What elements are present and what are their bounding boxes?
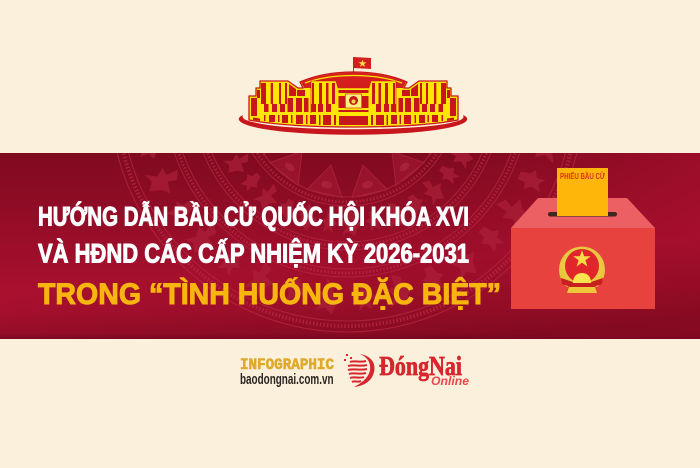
national emblem: [559, 247, 605, 293]
infographic label: INFOGRAPHIC: [240, 356, 334, 374]
flag: [353, 57, 371, 73]
title line 2: VÀ HĐND CÁC CẤP NHIỆM KỲ 2026-2031: [38, 238, 469, 268]
bronze drum pattern: [116, 153, 578, 332]
box lid: [511, 198, 655, 228]
wordmark: ĐóngNai: [379, 351, 462, 381]
title line 3 highlighted: TRONG “TÌNH HUỐNG ĐẶC BIỆT”: [38, 277, 501, 311]
ballot paper: [557, 168, 608, 216]
logo: National Assembly building: [239, 57, 467, 135]
ballot paper: PHIẾU BẦU CỬ: [560, 171, 605, 181]
drum figures inner band: [223, 153, 474, 236]
drum birds outer band: [140, 153, 554, 314]
slot: [548, 212, 617, 216]
infographic cover: [0, 57, 700, 387]
ballot box: [511, 168, 655, 309]
swoosh base: [239, 115, 467, 135]
logo mark: [344, 354, 374, 387]
building: [249, 72, 458, 127]
box front: [511, 228, 655, 309]
title line 1: HƯỚNG DẪN BẦU CỬ QUỐC HỘI KHÓA XVI: [38, 202, 469, 232]
online tag: Online: [431, 376, 470, 388]
site URL: baodongnai.com.vn: [240, 372, 334, 388]
central emblem: [346, 94, 362, 108]
logo: Dong Nai Online: [344, 351, 470, 388]
drum star triangles: [262, 153, 432, 198]
red banner: [0, 153, 700, 339]
footer: site credit: [240, 356, 334, 388]
